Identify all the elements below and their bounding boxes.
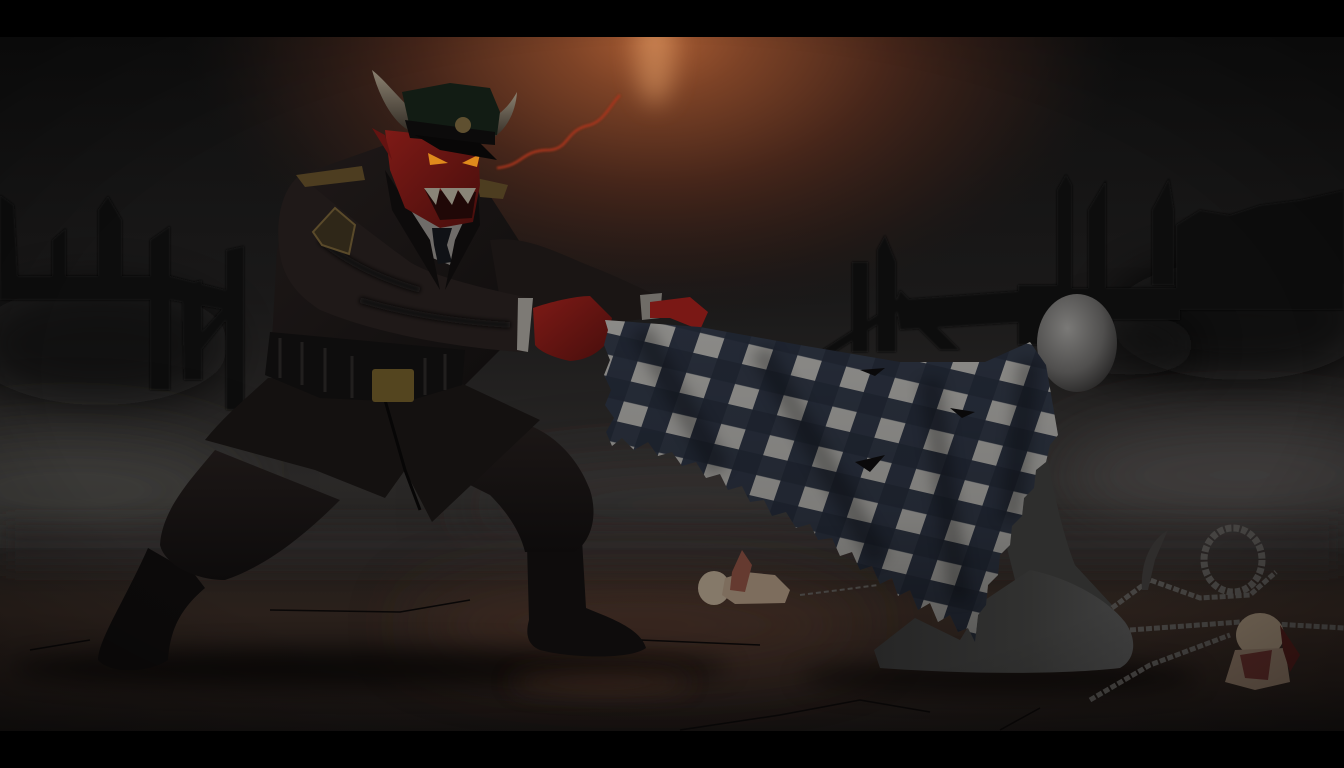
left boot xyxy=(98,548,205,670)
shirt and tie xyxy=(400,195,465,265)
right boot xyxy=(527,540,646,656)
large teddy bear on the ground xyxy=(1225,613,1300,690)
legs xyxy=(874,570,1133,673)
belt xyxy=(265,332,465,402)
near hand xyxy=(533,296,612,361)
ruined fence silhouette: left xyxy=(0,195,244,410)
arm and torso xyxy=(1000,460,1112,618)
coat skirt xyxy=(205,378,540,522)
far hand xyxy=(650,297,708,330)
left trouser leg xyxy=(160,450,340,580)
background sky with orange glow xyxy=(0,0,1344,557)
torso xyxy=(270,145,525,385)
small teddy bear on the ground xyxy=(698,550,790,605)
glowing eyes xyxy=(428,153,448,165)
chains on the ground xyxy=(800,528,1344,700)
fog banks xyxy=(0,425,1344,545)
right trouser leg xyxy=(440,420,594,552)
head xyxy=(385,130,480,228)
horns xyxy=(372,70,420,132)
ruined fence silhouette: right xyxy=(822,174,1344,380)
officer cap xyxy=(402,83,500,135)
far arm xyxy=(490,239,655,325)
cracked ground xyxy=(0,525,1344,731)
smoke from nostril xyxy=(497,95,620,168)
kneeling mannequin figure xyxy=(874,294,1133,673)
demon officer xyxy=(98,70,708,670)
torn checked cloth xyxy=(604,320,1058,642)
shoulder epaulettes and sleeve badge xyxy=(296,166,365,187)
near arm xyxy=(278,175,530,352)
head xyxy=(1037,294,1117,392)
